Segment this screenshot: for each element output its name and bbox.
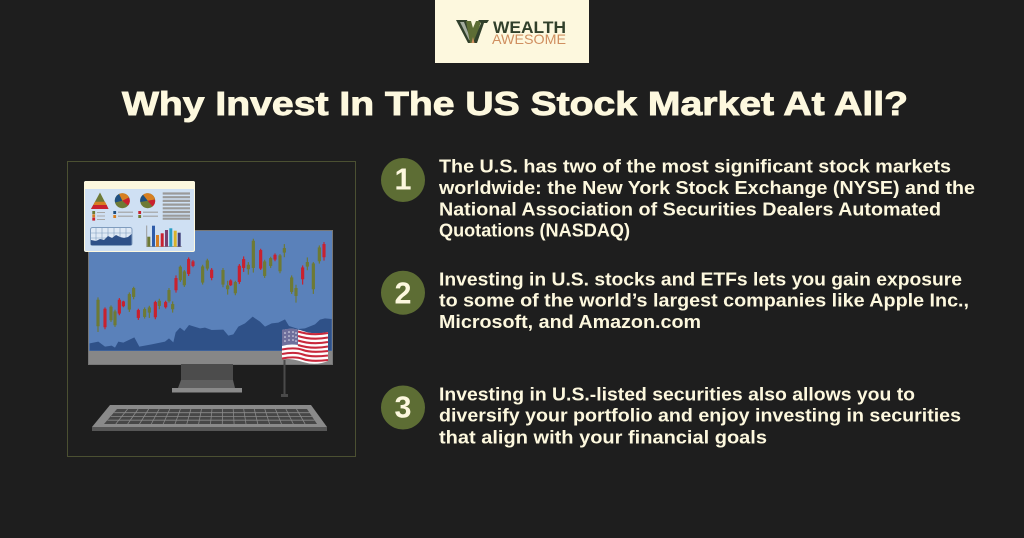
item 2 (381, 270, 969, 332)
logo text: AWESOME (492, 31, 566, 47)
icon: W mark (456, 20, 489, 43)
text block 3 (439, 385, 961, 447)
item 1 (381, 157, 975, 241)
text block 1: The U.S. has two of the most significant stock markets (439, 157, 951, 177)
text block 3: diversify your portfolio and enjoy investing in securities (439, 406, 961, 426)
text block 2 (439, 270, 969, 332)
pyramid chart (91, 192, 108, 221)
number badge 3 (381, 386, 425, 430)
monitor chin (89, 351, 332, 364)
item 3 (381, 385, 961, 447)
logo text (492, 19, 566, 47)
text lines (163, 194, 190, 219)
logo (435, 0, 589, 63)
text block 1: National Association of Securities Dealers Automated (439, 199, 941, 219)
logo text: WEALTH (493, 19, 566, 37)
text block 2: Microsoft, and Amazon.com (439, 312, 701, 332)
text block 2: to some of the world’s largest companies like Apple Inc., (439, 291, 969, 311)
line chart (90, 228, 132, 246)
monitor stand (172, 364, 242, 392)
monitor screen (88, 230, 332, 364)
text block 1: Quotations (NASDAQ) (439, 221, 630, 241)
text block 3: that align with your financial goals (439, 427, 767, 447)
keyboard (92, 405, 327, 431)
number badge 3: 3 (395, 390, 411, 424)
area chart (90, 317, 332, 351)
number badge 1 (381, 158, 425, 202)
dashboard card (84, 181, 195, 252)
pie chart 2 (138, 193, 158, 218)
number badge 2 (381, 271, 425, 315)
candlestick chart (97, 239, 325, 332)
pie chart 1 (113, 193, 133, 218)
text block 2: Investing in U.S. stocks and ETFs lets you gain exposure (439, 270, 962, 290)
number badge 1: 1 (395, 162, 412, 196)
icon: US flag (281, 329, 328, 397)
bar chart (147, 226, 182, 247)
number badge 2: 2 (395, 276, 411, 310)
panel: illustration frame (68, 162, 356, 456)
text block 1: worldwide: the New York Stock Exchange (NYSE) and the (438, 178, 975, 198)
text block 3: Investing in U.S.-listed securities also allows you to (439, 385, 915, 405)
title: Why Invest In The US Stock Market At All? (122, 85, 908, 122)
text block 1 (438, 157, 975, 241)
